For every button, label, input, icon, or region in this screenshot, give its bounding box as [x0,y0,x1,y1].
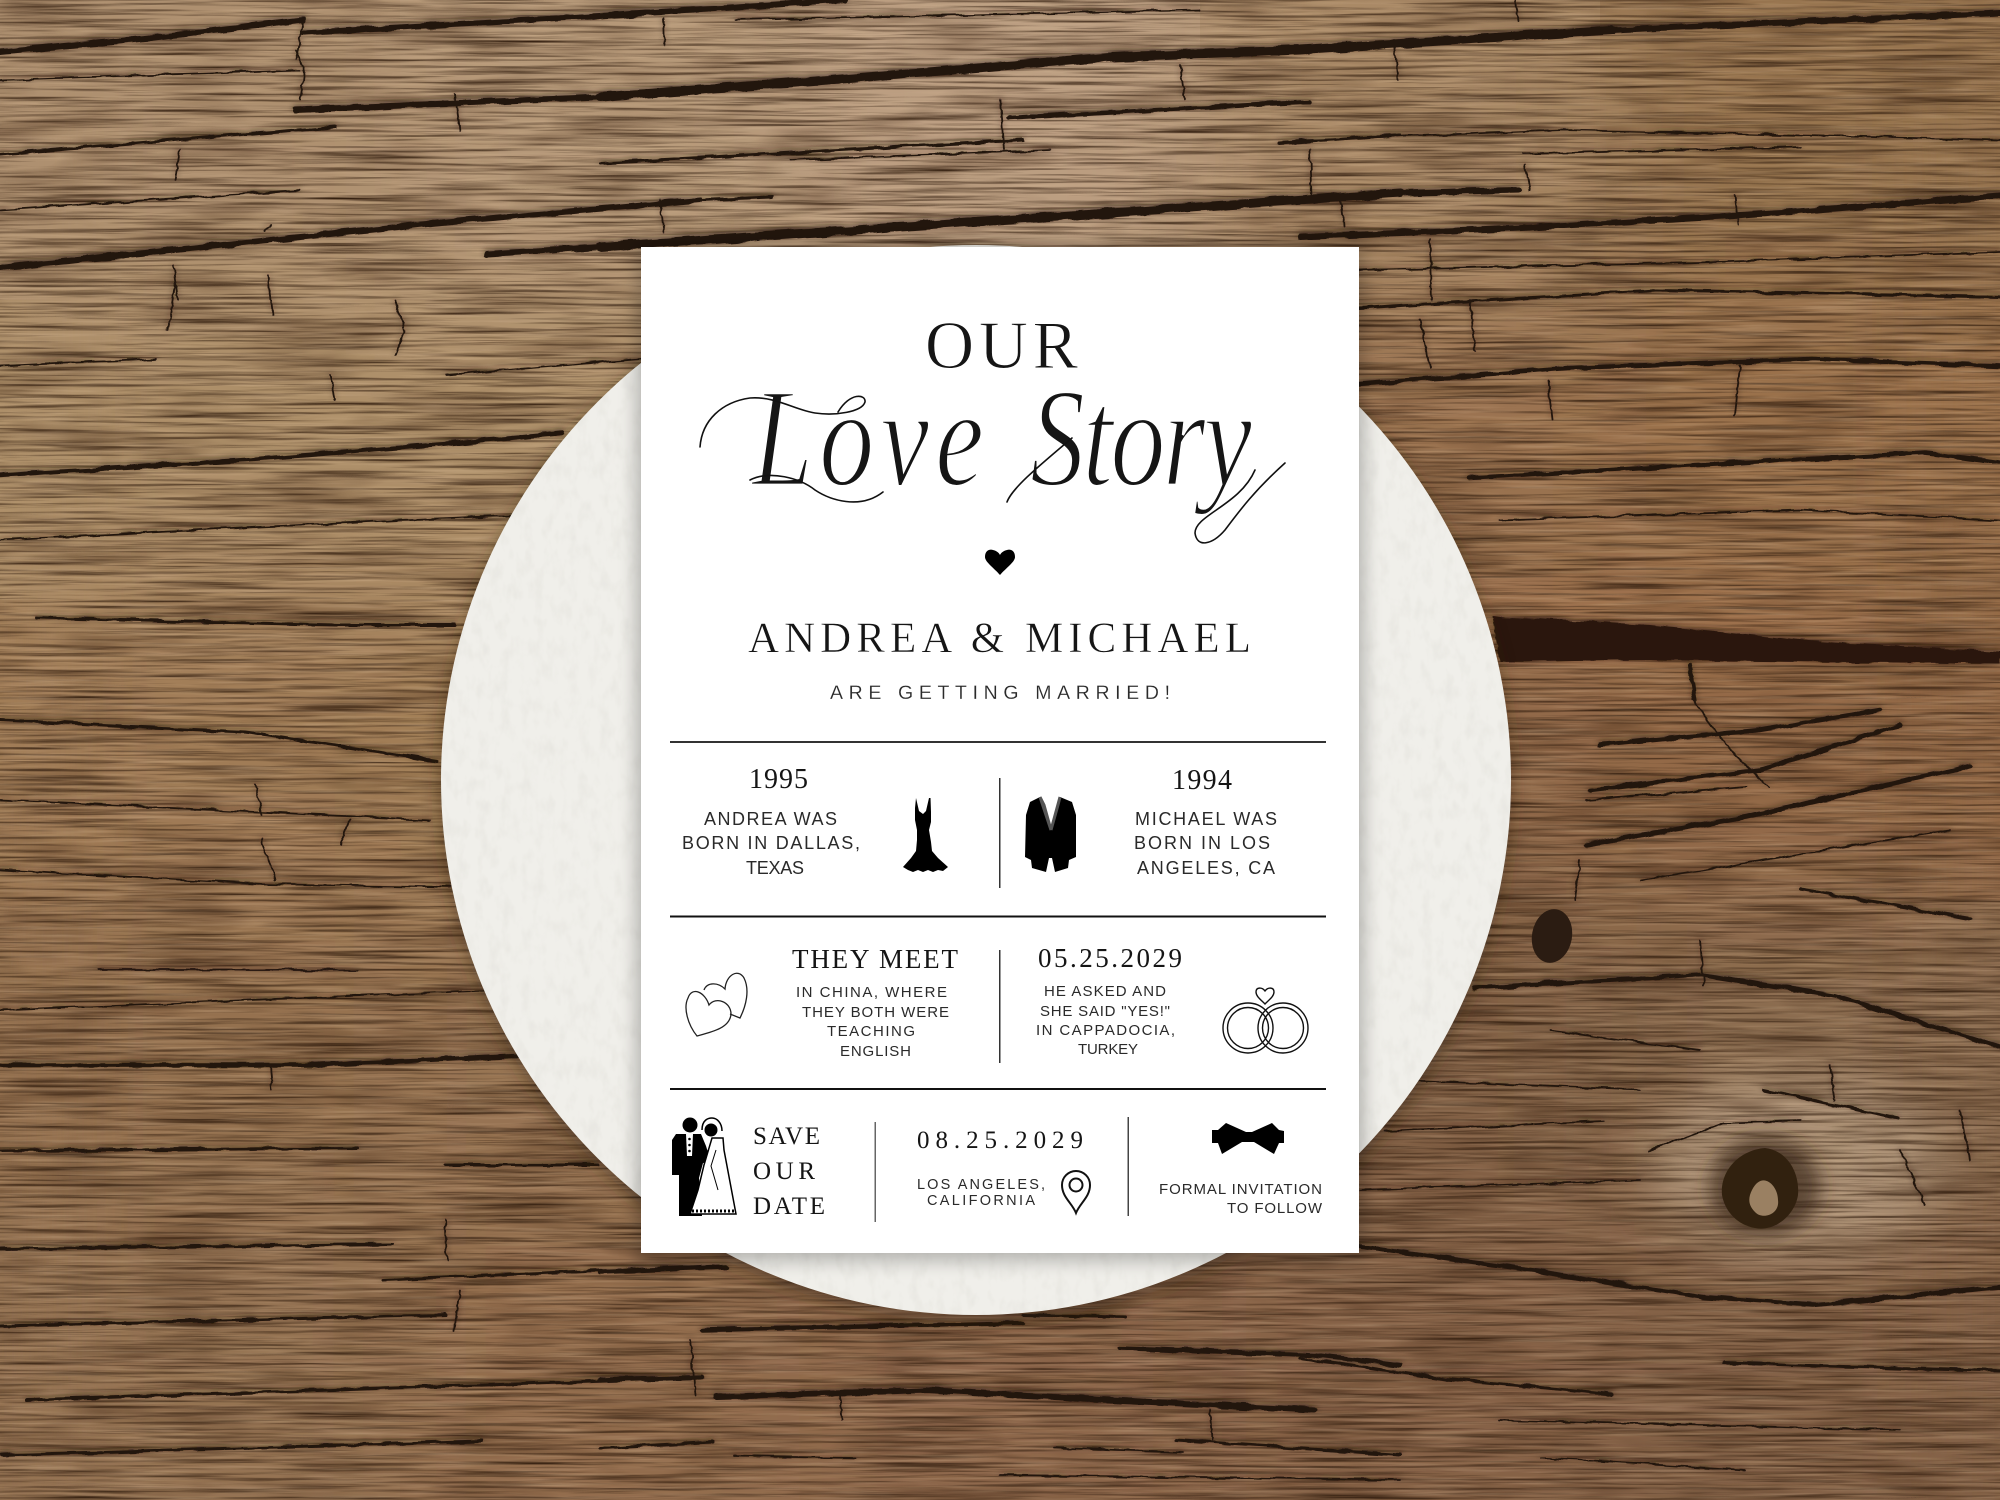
panel: they meet [686,944,958,1060]
divider: vertical bottom left [874,1122,876,1222]
icon: wedding rings with heart [1223,988,1308,1053]
title: Love Story script heading [700,360,1285,543]
knot: small dark knot [1528,906,1576,966]
location text: LOS ANGELES, [917,1177,1045,1193]
Michael text [1134,809,1277,878]
label: SAVE OUR DATE: DATE [753,1193,825,1220]
Andrea text [682,809,860,878]
Andrea text: BORN IN DALLAS, [682,833,860,853]
date: 05.25.2029: 05.25.2029 [1038,943,1182,973]
divider: rule one [670,741,1326,743]
divider: rule three [670,1088,1326,1090]
proposal text: IN CAPPADOCIA, [1036,1022,1175,1039]
panel: Andrea birth [682,764,948,878]
heading: couple names: ANDREA & MICHAEL [748,615,1251,662]
icon: bride and groom [672,1118,736,1216]
panel: formal invitation [1159,1123,1323,1217]
Andrea text: TEXAS [746,858,804,878]
location text [917,1177,1045,1209]
Michael text: BORN IN LOS [1134,833,1270,853]
card shadow [636,245,1364,1261]
knot: large knot [1709,1137,1821,1237]
panel: wedding date and place [917,1127,1090,1213]
divider: vertical bottom right [1128,1117,1129,1216]
date: 08.25.2029: 08.25.2029 [917,1127,1083,1154]
divider: rule two [670,916,1326,918]
decorative swashes [700,396,1285,543]
proposal text: TURKEY [1078,1041,1138,1058]
icon: tuxedo jacket [1025,795,1076,872]
Andrea text: ANDREA WAS [704,809,837,829]
panel: save our date [672,1118,825,1220]
divider: vertical row one [999,778,1000,888]
icon: solid heart [985,550,1015,575]
year 1994: 1994 [1172,765,1232,796]
panel: round white paper plate [440,245,1512,1322]
invitation text: FORMAL INVITATION [1159,1181,1322,1198]
heading: THEY MEET: THEY MEET [792,944,958,974]
title: Love Story script heading: Love [750,360,984,516]
meet text: THEY BOTH WERE [802,1004,949,1021]
year 1995: 1995 [749,764,808,795]
icon: dress [903,798,948,872]
label: SAVE OUR DATE: OUR [753,1158,815,1185]
icon: map pin [1062,1171,1090,1213]
proposal text: SHE SAID "YES!" [1040,1003,1170,1020]
proposal text: HE ASKED AND [1044,983,1166,1000]
title: OUR: OUR [925,307,1079,383]
icon: two outlined hearts [686,973,747,1036]
location text: CALIFORNIA [927,1193,1035,1209]
card sheet [641,247,1359,1253]
meet text: IN CHINA, WHERE [796,984,947,1001]
meet text: TEACHING [827,1023,915,1040]
invitation text [1159,1181,1323,1217]
subheading: ARE GETTING MARRIED! [830,682,1170,704]
title: Love Story script heading: Story [1030,360,1253,516]
panel: white invitation card [636,245,1364,1261]
Michael text: ANGELES, CA [1137,858,1275,878]
invitation text: TO FOLLOW [1227,1200,1323,1217]
label: SAVE OUR DATE: SAVE [753,1123,820,1150]
panel: proposal [1036,943,1308,1058]
Michael text: MICHAEL WAS [1135,809,1277,829]
icon: bow tie [1212,1123,1284,1154]
divider: vertical row two [999,950,1000,1063]
panel: Michael birth [1025,765,1277,878]
proposal text [1036,983,1175,1058]
label: SAVE OUR DATE [753,1123,825,1220]
meet text [796,984,949,1060]
meet text: ENGLISH [840,1043,911,1060]
